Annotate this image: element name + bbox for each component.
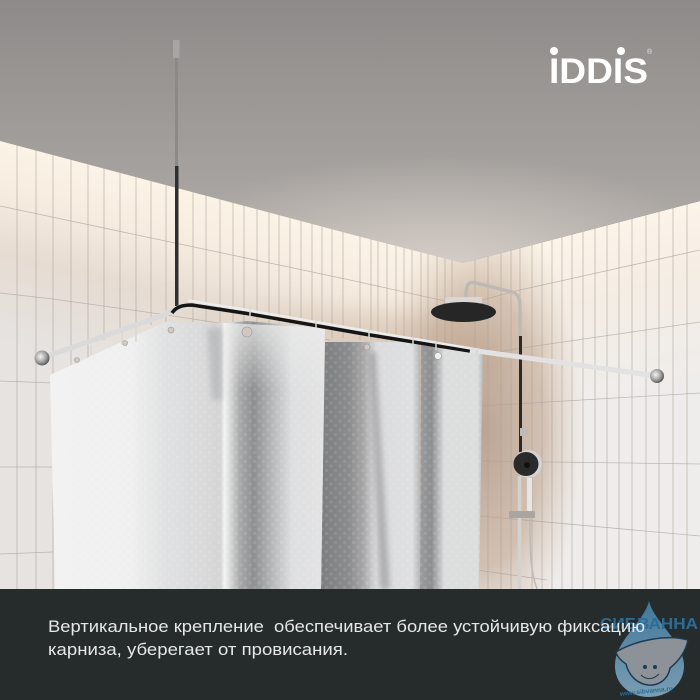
- watermark url: www.sibvanna.ru: [618, 685, 673, 698]
- bathroom wall left: [0, 130, 470, 600]
- shower system: [431, 283, 542, 589]
- ceiling: [0, 0, 700, 263]
- thermostat bar: [509, 511, 535, 518]
- hand shower: [514, 450, 542, 512]
- watermark name: СИБВАННА: [600, 616, 698, 633]
- caption line 2: карниза, уберегает от провисания.: [48, 640, 348, 659]
- bathroom wall right: [463, 201, 700, 600]
- curtain rings and grommets: [74, 306, 477, 362]
- curtain front panel: [50, 321, 325, 589]
- curtain back panel middle: [321, 342, 420, 589]
- bathtub face: [641, 666, 659, 679]
- rod right section: [188, 300, 480, 350]
- right wall mount: [650, 369, 664, 383]
- rain shower head: [431, 297, 496, 322]
- shower column and arm: [466, 283, 520, 340]
- caption bar: [0, 589, 700, 700]
- logo: iddis: ®: [647, 48, 653, 56]
- caption line 1: Вертикальное крепление обеспечивает более устойчивую фиксацию: [48, 617, 645, 636]
- rod left section: [42, 305, 188, 358]
- bathtub: [616, 638, 688, 685]
- slider bracket: [520, 428, 528, 436]
- lower column section: [518, 476, 521, 589]
- caption text: [48, 617, 645, 659]
- dark column section: [519, 336, 522, 452]
- wall tile grid: [0, 130, 700, 589]
- hose: [530, 518, 537, 589]
- water drop: [615, 601, 684, 697]
- rod dark underside: [172, 305, 470, 351]
- logo: iddis: IDDIS: [549, 52, 648, 91]
- warm shadow in the corner: [330, 200, 600, 600]
- vertical ceiling support rod: [173, 40, 180, 306]
- horizontal curtain rod: [34, 300, 664, 383]
- warm band above the curtain: [150, 300, 500, 380]
- left wall mount: [34, 350, 50, 366]
- watermark: sibvanna mascot: [600, 601, 698, 698]
- curtain back panel right: [420, 345, 483, 589]
